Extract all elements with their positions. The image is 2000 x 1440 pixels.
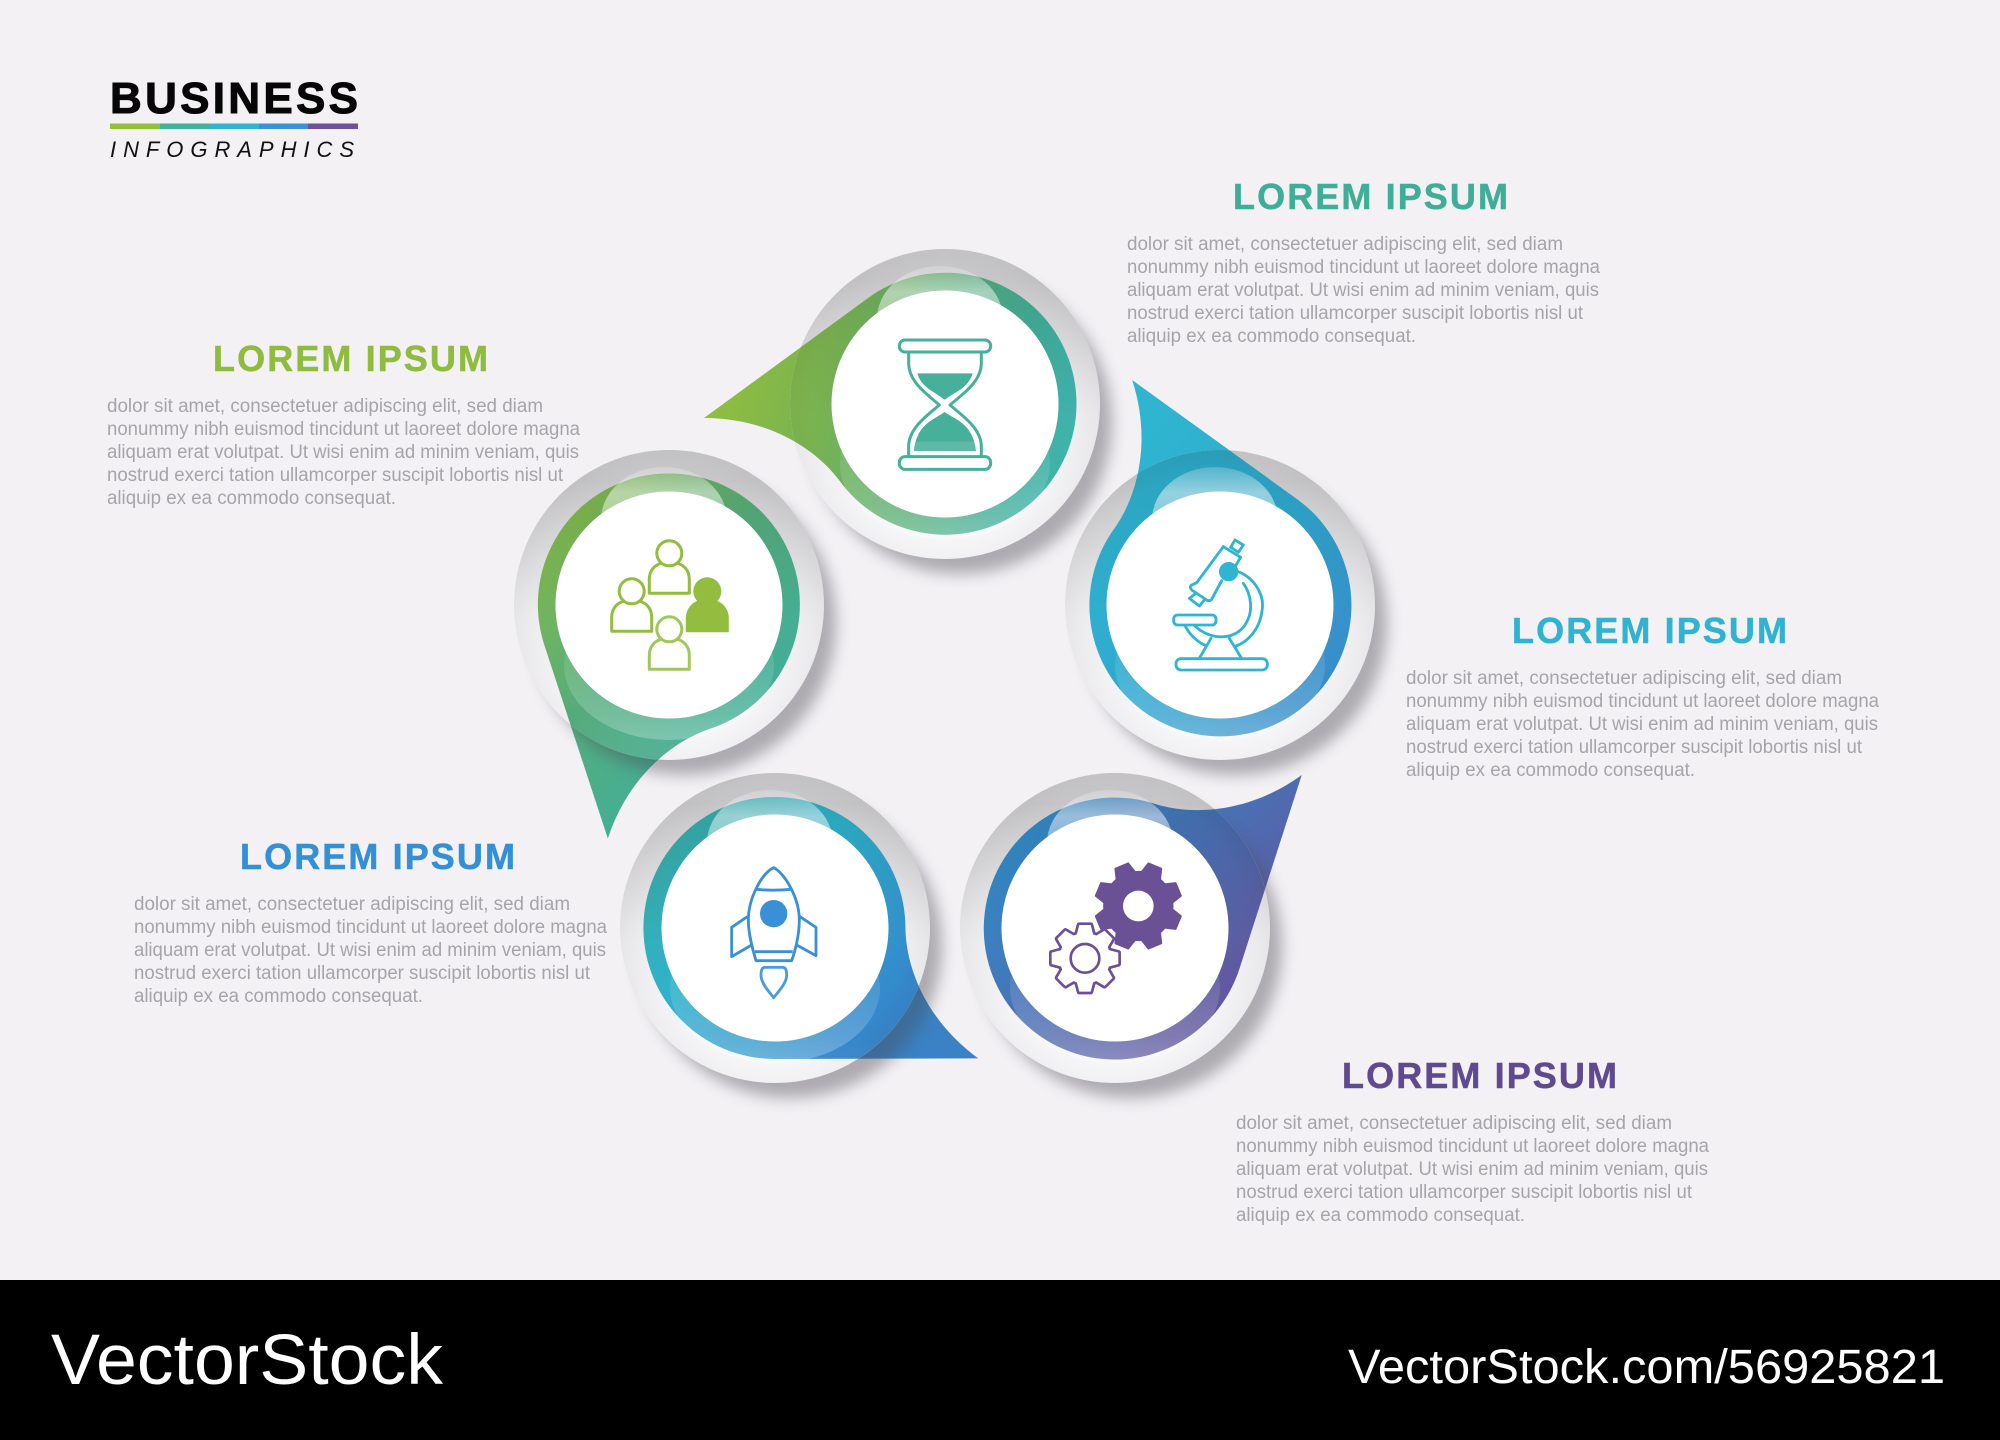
body text: nonummy nibh euismod tincidunt ut laoreet dolore magna <box>1406 691 1879 712</box>
panel: hourglass ring <box>704 249 1112 574</box>
body text: nostrud exerci tation ullamcorper suscipit lobortis nisl ut <box>1236 1182 1693 1203</box>
footer url text: VectorStock.com/56925821 <box>1348 1341 1945 1394</box>
heading: LOREM IPSUM <box>213 338 488 379</box>
body text: nonummy nibh euismod tincidunt ut laoreet dolore magna <box>134 917 607 938</box>
footer logo text: VectorStock <box>51 1321 444 1400</box>
panel: rocket ring <box>620 773 978 1106</box>
body text <box>107 396 580 509</box>
body text: dolor sit amet, consectetuer adipiscing elit, sed diam <box>1236 1113 1672 1134</box>
title: BUSINESS: BUSINESS <box>110 74 358 123</box>
heading: LOREM IPSUM <box>1512 610 1787 651</box>
body text: dolor sit amet, consectetuer adipiscing elit, sed diam <box>1127 234 1563 255</box>
heading: LOREM IPSUM <box>240 836 515 877</box>
ring tail <box>704 273 1076 535</box>
heading: LOREM IPSUM <box>1233 176 1508 217</box>
icon: microscope <box>1174 540 1267 670</box>
footer bar <box>0 1280 2000 1440</box>
body text: aliquip ex ea commodo consequat. <box>1127 326 1416 347</box>
body text: aliquam erat volutpat. Ut wisi enim ad minim veniam, quis <box>134 940 606 961</box>
text block: teal <box>1127 176 1600 347</box>
ring tail <box>1021 335 1386 770</box>
body text: dolor sit amet, consectetuer adipiscing elit, sed diam <box>107 396 543 417</box>
body text: aliquam erat volutpat. Ut wisi enim ad minim veniam, quis <box>1127 280 1599 301</box>
body text: aliquip ex ea commodo consequat. <box>1406 760 1695 781</box>
body text: aliquam erat volutpat. Ut wisi enim ad minim veniam, quis <box>1406 714 1878 735</box>
body text: aliquip ex ea commodo consequat. <box>134 986 423 1007</box>
body text <box>1127 234 1600 347</box>
body text <box>1236 1113 1709 1226</box>
body text: nonummy nibh euismod tincidunt ut laoreet dolore magna <box>107 419 580 440</box>
heading: LOREM IPSUM <box>1342 1055 1617 1096</box>
body text <box>1406 668 1879 781</box>
body text: aliquam erat volutpat. Ut wisi enim ad minim veniam, quis <box>107 442 579 463</box>
icon: hourglass <box>899 340 991 469</box>
body text: nonummy nibh euismod tincidunt ut laoreet dolore magna <box>1127 257 1600 278</box>
body text: dolor sit amet, consectetuer adipiscing elit, sed diam <box>1406 668 1842 689</box>
body text: nostrud exerci tation ullamcorper suscipit lobortis nisl ut <box>134 963 591 984</box>
text block: green <box>107 338 580 509</box>
body text: aliquip ex ea commodo consequat. <box>1236 1205 1525 1226</box>
ring tail <box>591 745 1047 1176</box>
text block: purple <box>1236 1055 1709 1226</box>
body text: dolor sit amet, consectetuer adipiscing elit, sed diam <box>134 894 570 915</box>
subtitle: INFOGRAPHICS: INFOGRAPHICS <box>110 137 354 162</box>
body text: nonummy nibh euismod tincidunt ut laoreet dolore magna <box>1236 1136 1709 1157</box>
body text: aliquam erat volutpat. Ut wisi enim ad minim veniam, quis <box>1236 1159 1708 1180</box>
panel: gears ring <box>960 773 1302 1106</box>
text block: blue <box>134 836 607 1007</box>
text block: cyan <box>1406 610 1879 781</box>
icon: rocket <box>732 868 816 998</box>
icon: people <box>612 541 729 669</box>
colour bar <box>110 124 358 129</box>
icon: gears <box>1052 862 1182 992</box>
ring tail <box>470 439 834 875</box>
body text: nostrud exerci tation ullamcorper suscipit lobortis nisl ut <box>1406 737 1863 758</box>
title logo <box>110 74 358 162</box>
body text: nostrud exerci tation ullamcorper suscipit lobortis nisl ut <box>107 465 564 486</box>
panel: people ring <box>514 450 844 838</box>
body text: nostrud exerci tation ullamcorper suscipit lobortis nisl ut <box>1127 303 1584 324</box>
panel: microscope ring <box>1065 380 1396 784</box>
ring tail <box>932 681 1387 1112</box>
body text <box>134 894 607 1007</box>
body text: aliquip ex ea commodo consequat. <box>107 488 396 509</box>
